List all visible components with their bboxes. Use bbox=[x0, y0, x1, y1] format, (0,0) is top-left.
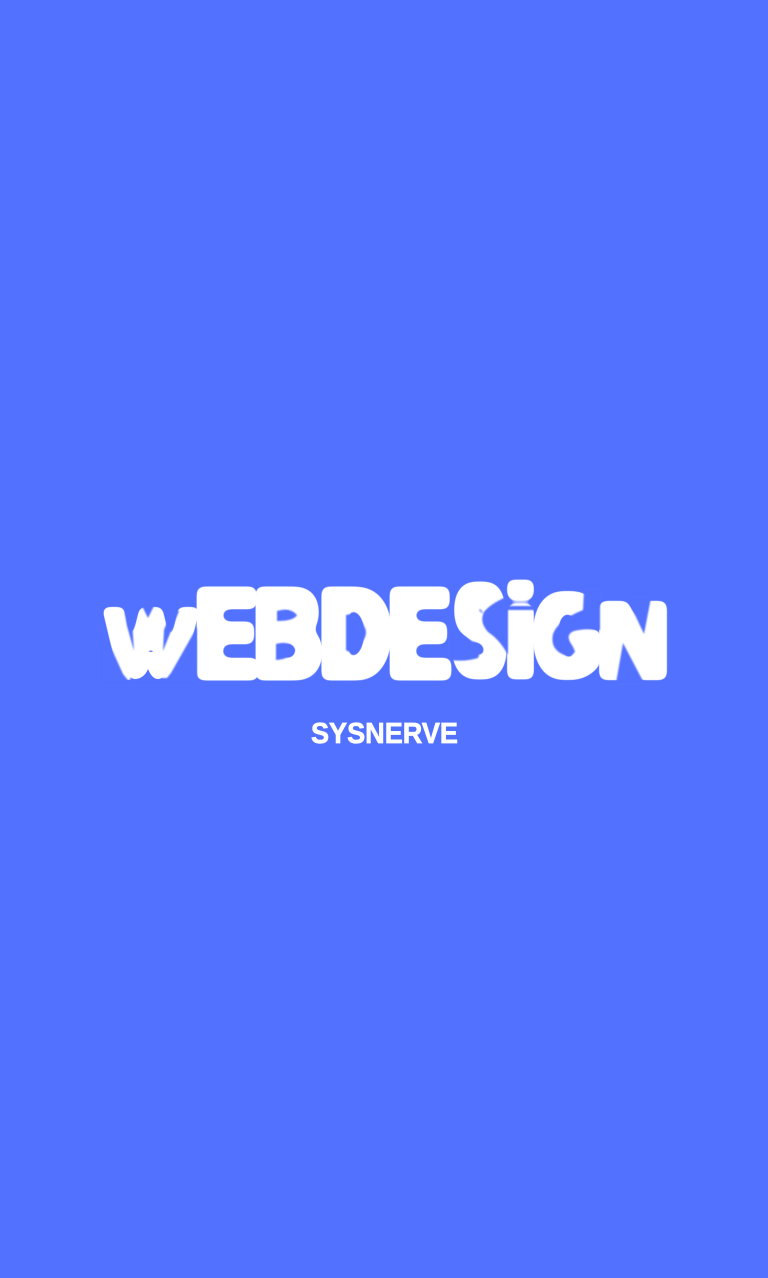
title: wEBDESiGN bubble lettering: N bbox=[601, 584, 665, 698]
title: wEBDESiGN bubble lettering: B bbox=[257, 564, 319, 703]
title: wEBDESiGN bubble lettering bbox=[106, 560, 665, 704]
title: wEBDESiGN bubble lettering: G bbox=[536, 572, 598, 699]
counters and notches of the bubble letters bbox=[100, 590, 651, 684]
title: wEBDESiGN bubble lettering: E bbox=[198, 565, 255, 703]
title: wEBDESiGN bubble lettering: i bbox=[507, 561, 534, 704]
title: wEBDESiGN bubble lettering: E bbox=[391, 565, 448, 703]
subtitle: SYSNERVE: SYSNERVE bbox=[311, 718, 458, 750]
title: wEBDESiGN bubble lettering: D bbox=[322, 564, 388, 702]
bubble body fill between the strokes of the w bbox=[127, 652, 168, 679]
title: wEBDESiGN bubble lettering: S bbox=[456, 560, 503, 702]
title: wEBDESiGN bubble lettering: w bbox=[106, 566, 196, 703]
